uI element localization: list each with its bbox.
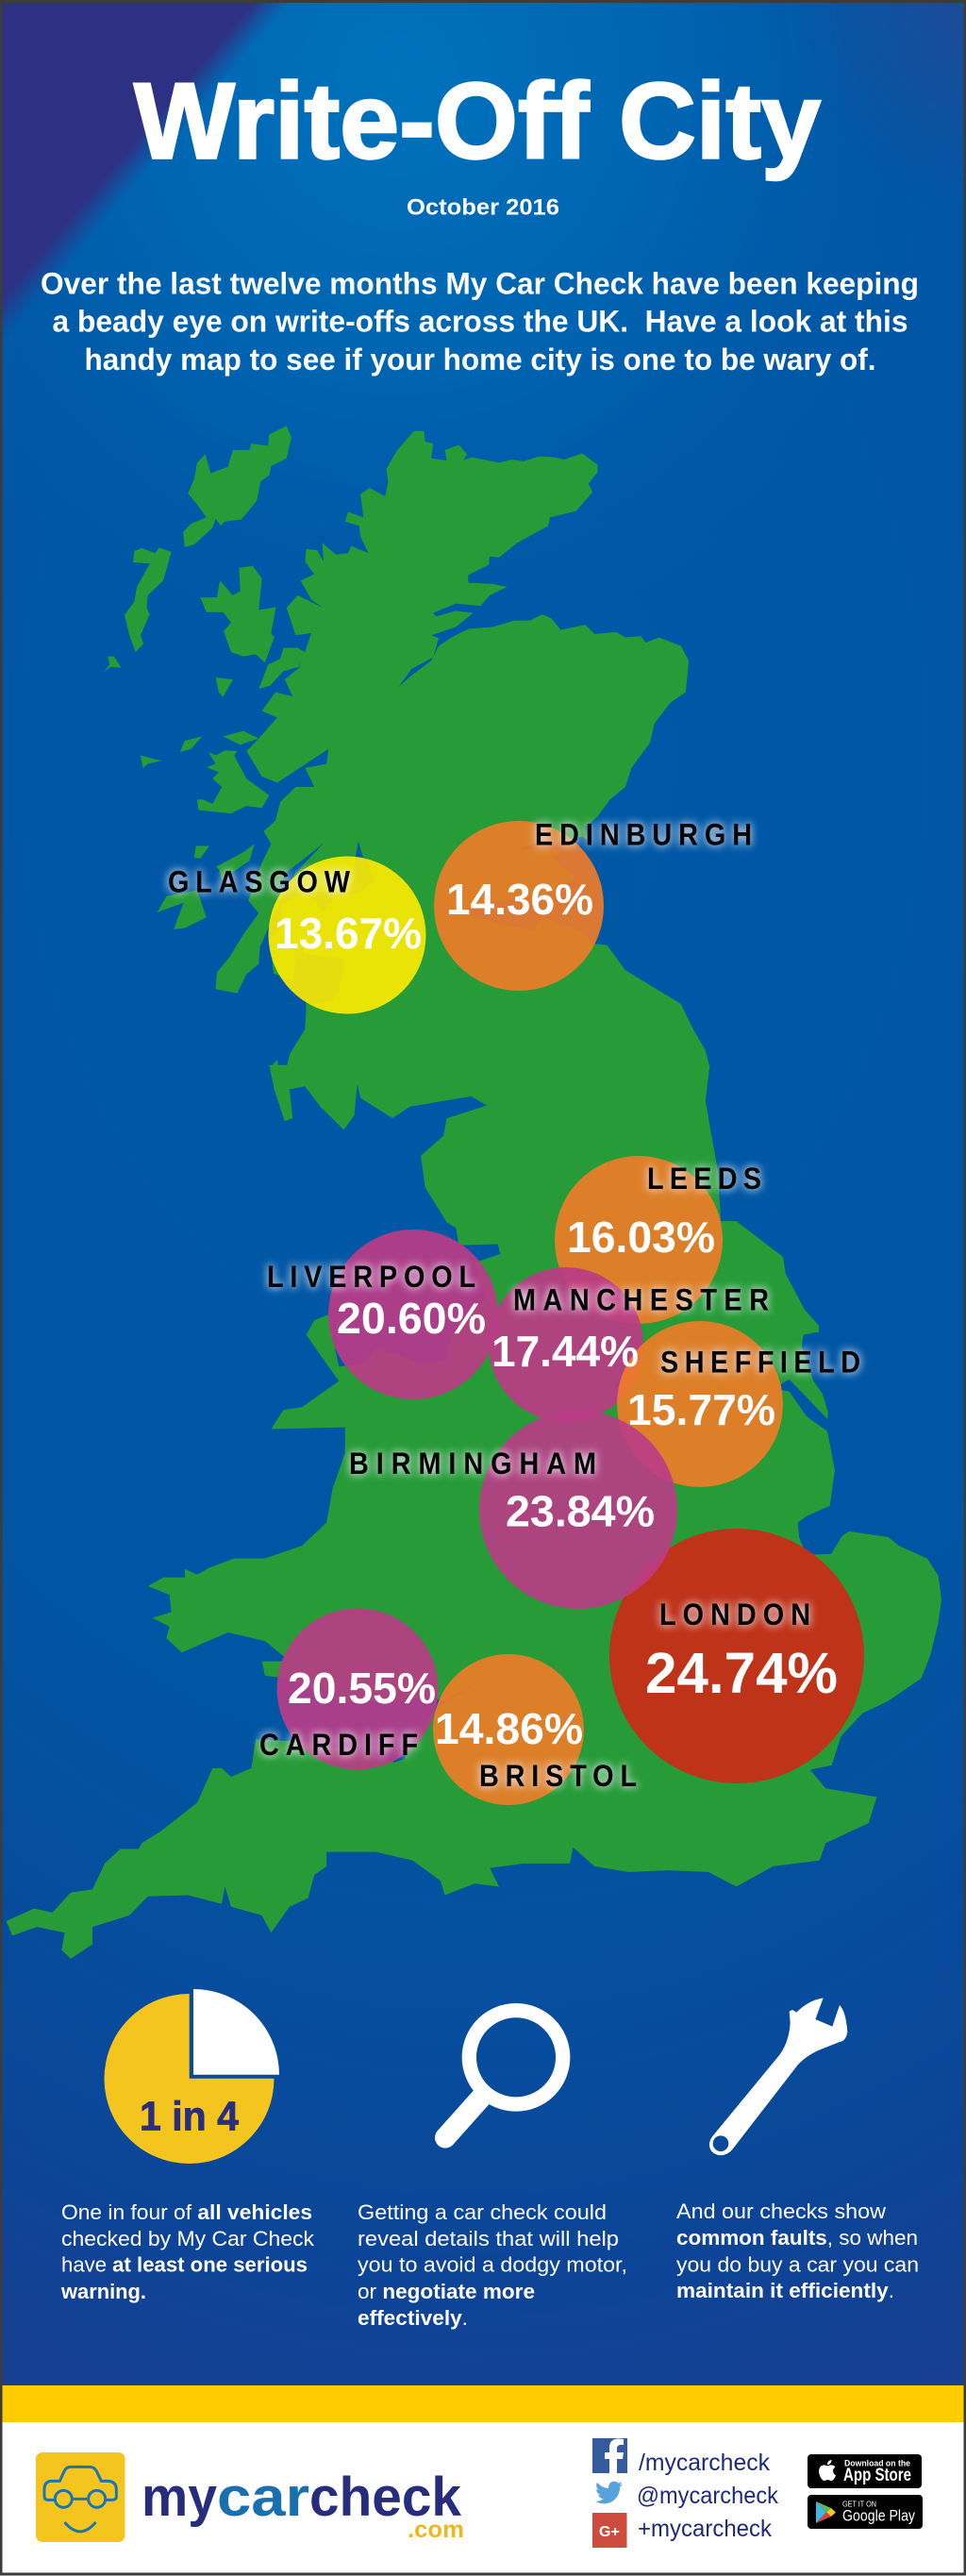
- intro text: a beady eye on write-offs across the UK. Have a look at this: [53, 304, 908, 338]
- logo wordmark: [142, 2467, 464, 2543]
- text block: common faults: you do buy a car you can: [676, 2253, 919, 2276]
- bubble: London: [609, 1529, 864, 1783]
- app store badge: App Store: [843, 2466, 911, 2485]
- logo wordmark: .com: [408, 2517, 464, 2543]
- google play badge: [808, 2495, 923, 2529]
- Colonsay, Jura, Islay: [194, 845, 209, 859]
- value: Glasgow: 13.67%: [275, 909, 422, 958]
- logo wordmark: my: [142, 2467, 217, 2528]
- text block: car check: [358, 2200, 627, 2330]
- text block: car check: Getting a car check could: [358, 2200, 607, 2224]
- label: Leeds: LEEDS: [647, 1163, 761, 1196]
- text block: car check: or negotiate more: [358, 2280, 535, 2303]
- text block: common faults: common faults, so when: [676, 2226, 918, 2250]
- icon: magnifying glass: [445, 2011, 563, 2138]
- icon: spanner: [709, 1998, 847, 2155]
- value: Birmingham: 23.84%: [506, 1487, 655, 1536]
- yellow band: [0, 2385, 966, 2422]
- icon: 1 in 4 pie chart: [105, 1989, 279, 2164]
- title: Write-Off City: [134, 62, 821, 181]
- bubble: Leeds: [555, 1156, 723, 1324]
- bubble: Glasgow: [268, 857, 426, 1013]
- google plus: G+: [599, 2524, 620, 2540]
- bubble: Bristol: [433, 1654, 584, 1805]
- water detail under Edinburgh and Glasgow: [269, 837, 632, 1005]
- text block: car check: reveal details that will help: [358, 2227, 619, 2250]
- city names: [168, 818, 860, 1793]
- bubble: Cardiff: [277, 1608, 438, 1770]
- date: October 2016: [407, 194, 559, 221]
- Lewis and Harris: [183, 426, 291, 547]
- Tiree and Coll: [141, 756, 161, 768]
- twitter: @mycarcheck: [637, 2483, 778, 2509]
- logo icon: [36, 2452, 125, 2542]
- footer panel: [0, 2422, 966, 2576]
- value: Sheffield: 15.77%: [627, 1385, 775, 1434]
- intro text: Over the last twelve months My Car Check have been keeping: [41, 266, 919, 300]
- google play badge: Google Play: [842, 2506, 915, 2525]
- value: Bristol: 14.86%: [435, 1704, 583, 1753]
- map of Great Britain: [7, 426, 941, 1959]
- value: Leeds: 16.03%: [567, 1213, 715, 1262]
- Scotland: [104, 426, 709, 1068]
- app store badge: Download on the: [844, 2459, 910, 2468]
- Rum: [216, 677, 233, 697]
- google play badge: GET IT ON: [842, 2501, 876, 2508]
- bubble: Manchester: [489, 1267, 643, 1422]
- value: Edinburgh: 14.36%: [446, 875, 593, 924]
- text block: one in four: One in four of all vehicles: [61, 2200, 312, 2224]
- bubble: Edinburgh: [434, 821, 604, 991]
- Mull: [197, 750, 269, 813]
- text block: one in four: warning.: [60, 2280, 146, 2303]
- text block: common faults: And our checks show: [676, 2200, 886, 2223]
- intro text: handy map to see if your home city is one to be wary of.: [85, 343, 875, 376]
- value: London: 24.74%: [645, 1641, 838, 1705]
- label: Glasgow: GLASGOW: [168, 865, 350, 899]
- text block: one in four: [60, 2200, 315, 2303]
- facebook: /mycarcheck: [639, 2450, 770, 2476]
- label: Liverpool: LIVERPOOL: [267, 1261, 475, 1294]
- value: Liverpool: 20.60%: [337, 1294, 486, 1343]
- label: Birmingham: BIRMINGHAM: [349, 1447, 596, 1480]
- label: Sheffield: SHEFFIELD: [660, 1346, 860, 1380]
- city percentages: [275, 875, 838, 1753]
- Skye: [200, 566, 276, 662]
- text block: common faults: [676, 2200, 919, 2302]
- icon: 1 in 4 pie chart: 1 in 4: [140, 2093, 239, 2140]
- England and Wales: [7, 1065, 941, 1959]
- text block: car check: you to avoid a dodgy motor,: [358, 2253, 627, 2276]
- intro text: [41, 266, 919, 376]
- bubble: Sheffield: [617, 1321, 783, 1487]
- Barra: [104, 657, 122, 672]
- label: Edinburgh: EDINBURGH: [535, 818, 752, 852]
- bubble: Liverpool: [328, 1229, 498, 1399]
- facebook: [592, 2438, 770, 2476]
- value: Manchester: 17.44%: [491, 1327, 639, 1376]
- google plus: +mycarcheck: [638, 2516, 772, 2542]
- value: Cardiff: 20.55%: [288, 1664, 436, 1713]
- label: Bristol: BRISTOL: [479, 1760, 637, 1793]
- text block: common faults: maintain it efficiently .: [676, 2279, 894, 2302]
- app store badge: [808, 2454, 922, 2488]
- text block: one in four: have at least one serious: [61, 2253, 308, 2276]
- city bubbles: [268, 821, 864, 1805]
- Uist: [125, 547, 172, 652]
- label: Manchester: MANCHESTER: [513, 1283, 769, 1317]
- label: London: LONDON: [659, 1598, 810, 1631]
- label: Cardiff: CARDIFF: [259, 1729, 418, 1762]
- text block: one in four: checked by My Car Check: [61, 2227, 315, 2250]
- logo wordmark: car: [217, 2467, 309, 2528]
- text block: car check: effectively.: [358, 2306, 468, 2330]
- logo wordmark: check: [309, 2467, 462, 2528]
- google plus: [592, 2513, 772, 2548]
- bubble: Birmingham: [479, 1411, 677, 1609]
